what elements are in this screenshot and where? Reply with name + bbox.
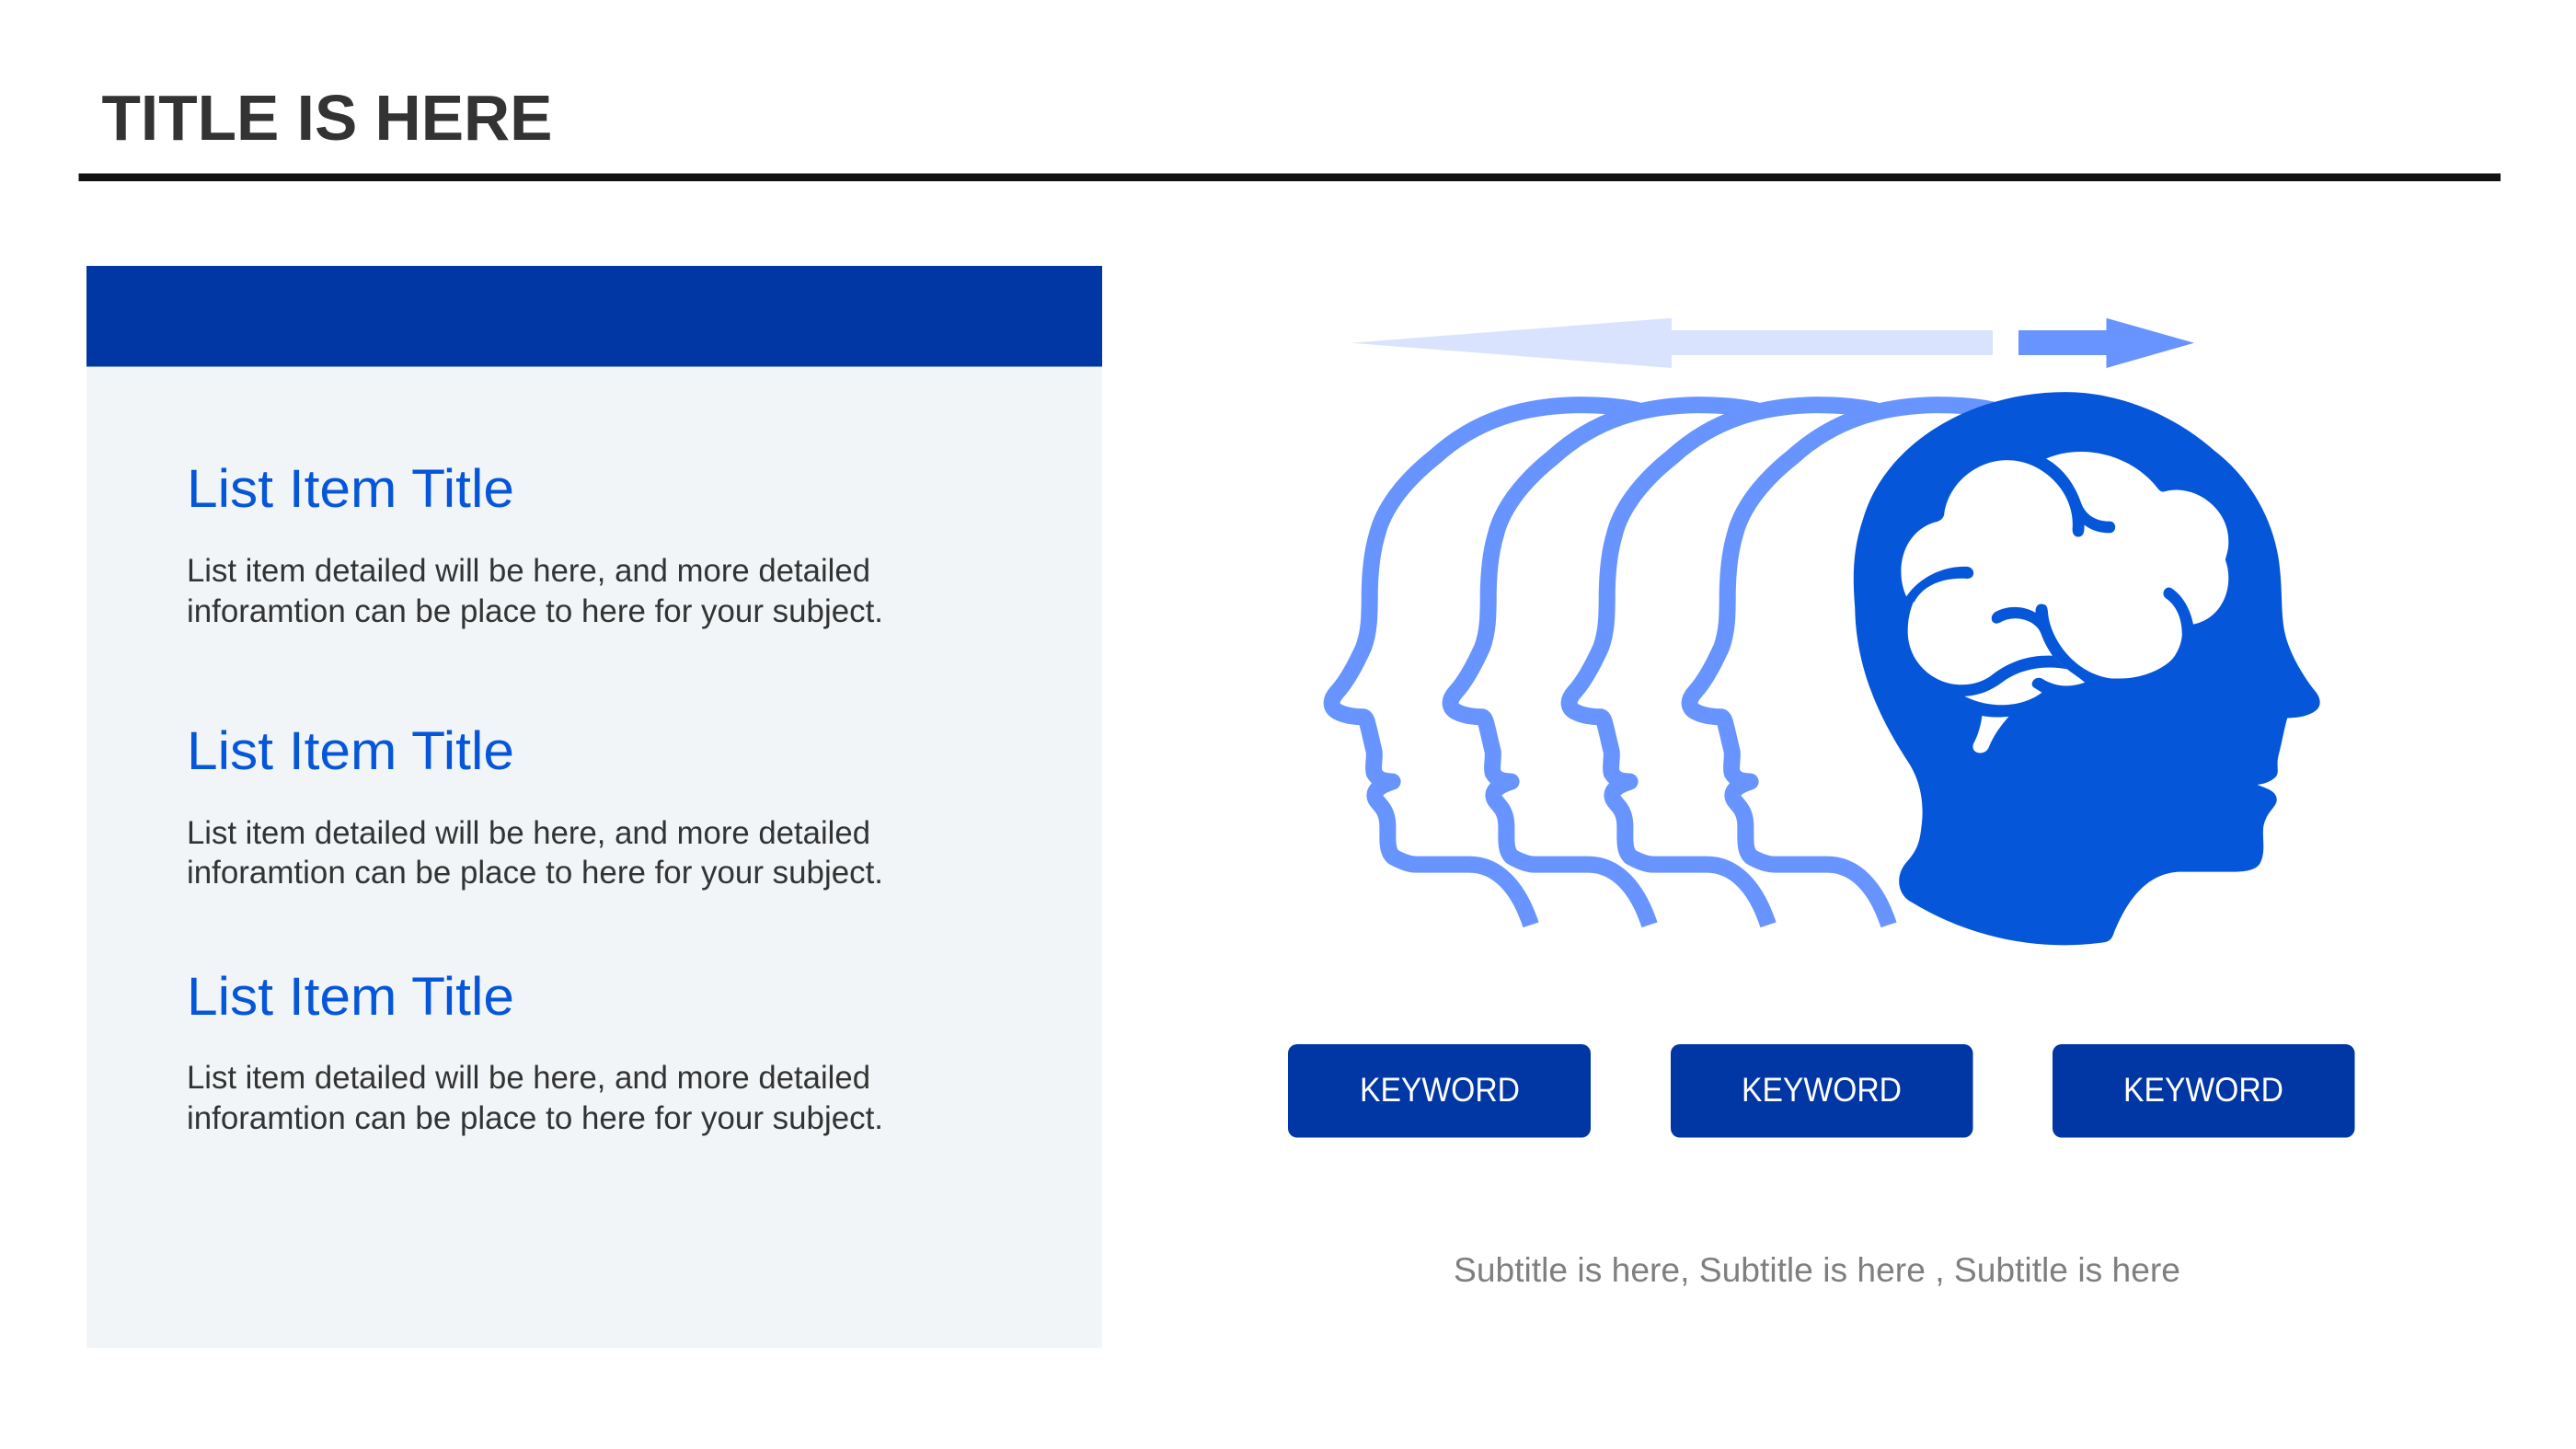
- list item 1: List item detailed will be here, and more detailed: [187, 553, 870, 589]
- list item 1: List Item Title: [187, 459, 514, 519]
- list item 1: inforamtion can be place to here for your subject.: [187, 593, 883, 629]
- keyword button 2: KEYWORD: [1742, 1071, 1902, 1109]
- icon: outlined head 2: [1451, 405, 1759, 925]
- keyword button 1: [1288, 1044, 1591, 1137]
- title: TITLE IS HERE: [101, 82, 552, 154]
- list item 2: List item detailed will be here, and more detailed: [187, 815, 870, 851]
- subtitle: Subtitle is here, Subtitle is here , Subtitle is here: [1454, 1251, 2180, 1289]
- keyword button 1: KEYWORD: [1360, 1071, 1520, 1109]
- brain: [1901, 452, 2228, 753]
- arrow: pale left arrow: [1351, 318, 1993, 368]
- keyword button 2: [1671, 1044, 1972, 1137]
- head silhouette: [1854, 392, 2320, 945]
- arrow: blue right arrow: [2018, 318, 2194, 368]
- panel: list: [86, 266, 1102, 1348]
- list item 1: [187, 459, 883, 629]
- title rule: [79, 173, 2501, 181]
- list item 3: [187, 967, 883, 1136]
- icon: outlined head 3: [1570, 405, 1878, 925]
- keyword button 3: KEYWORD: [2123, 1071, 2283, 1109]
- list item 3: inforamtion can be place to here for your subject.: [187, 1100, 883, 1136]
- icon: outlined head 4: [1690, 405, 1998, 925]
- icon: outlined head 1: [1332, 405, 1640, 925]
- panel background: [86, 266, 1102, 1348]
- list item 2: List Item Title: [187, 721, 514, 781]
- keyword button 3: [2053, 1044, 2355, 1137]
- panel header bar: [86, 266, 1102, 366]
- list item 3: List item detailed will be here, and more detailed: [187, 1060, 870, 1096]
- icon: solid head with brain: [1854, 392, 2320, 945]
- list item 2: [187, 721, 883, 891]
- list item 3: List Item Title: [187, 967, 514, 1027]
- list item 2: inforamtion can be place to here for your subject.: [187, 855, 883, 891]
